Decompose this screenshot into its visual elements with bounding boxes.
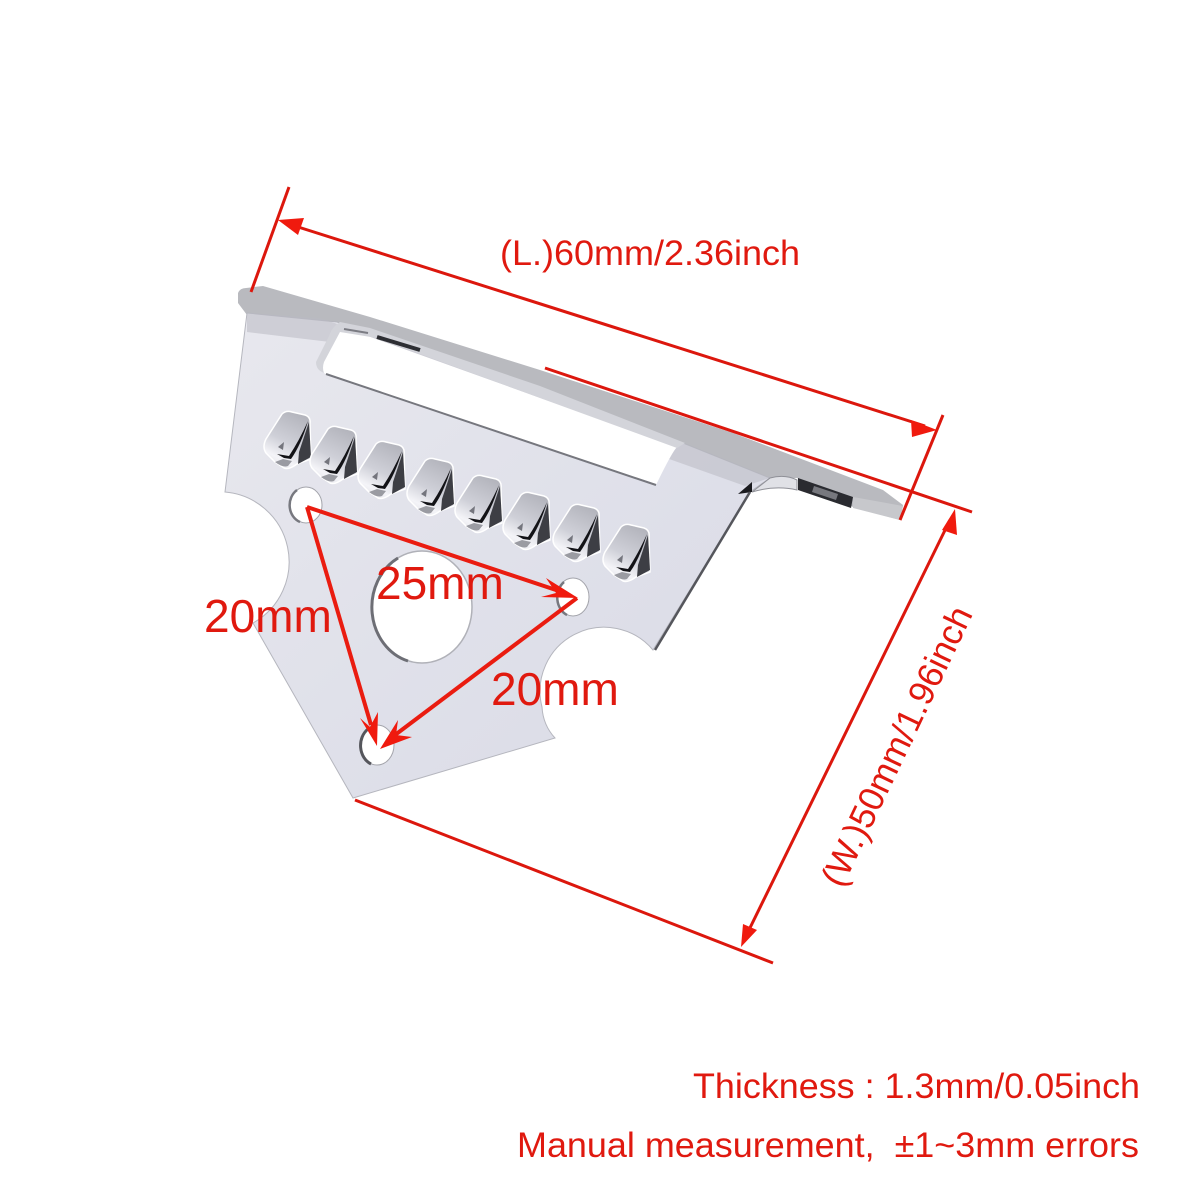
studs (264, 411, 650, 582)
plate body (225, 313, 770, 798)
slot chrome edge (316, 322, 685, 448)
right edge dark bevel (655, 492, 750, 650)
triangle hole spacing arrows (307, 507, 578, 749)
mounting holes (290, 487, 589, 765)
dimension: length (251, 187, 943, 520)
label: 20mm right: 20mm (491, 663, 619, 715)
centre hole (372, 551, 472, 663)
label: length: (L.)60mm/2.36inch (500, 233, 800, 273)
note: thickness: Thickness : 1.3mm/0.05inch (693, 1066, 1140, 1106)
shadow band under flange (247, 313, 770, 486)
label: 25mm: 25mm (376, 557, 504, 609)
slot (316, 322, 685, 485)
flange: top folded edge (238, 286, 903, 520)
label: 20mm left: 20mm (204, 590, 332, 642)
panel: chrome tailpiece plate (225, 286, 903, 798)
rear tab (752, 476, 797, 492)
note: measurement error: Manual measurement, ±1~3mm errors (517, 1125, 1139, 1165)
dimension: width (355, 368, 972, 963)
label: width: (W.)50mm/1.96inch (813, 600, 981, 892)
